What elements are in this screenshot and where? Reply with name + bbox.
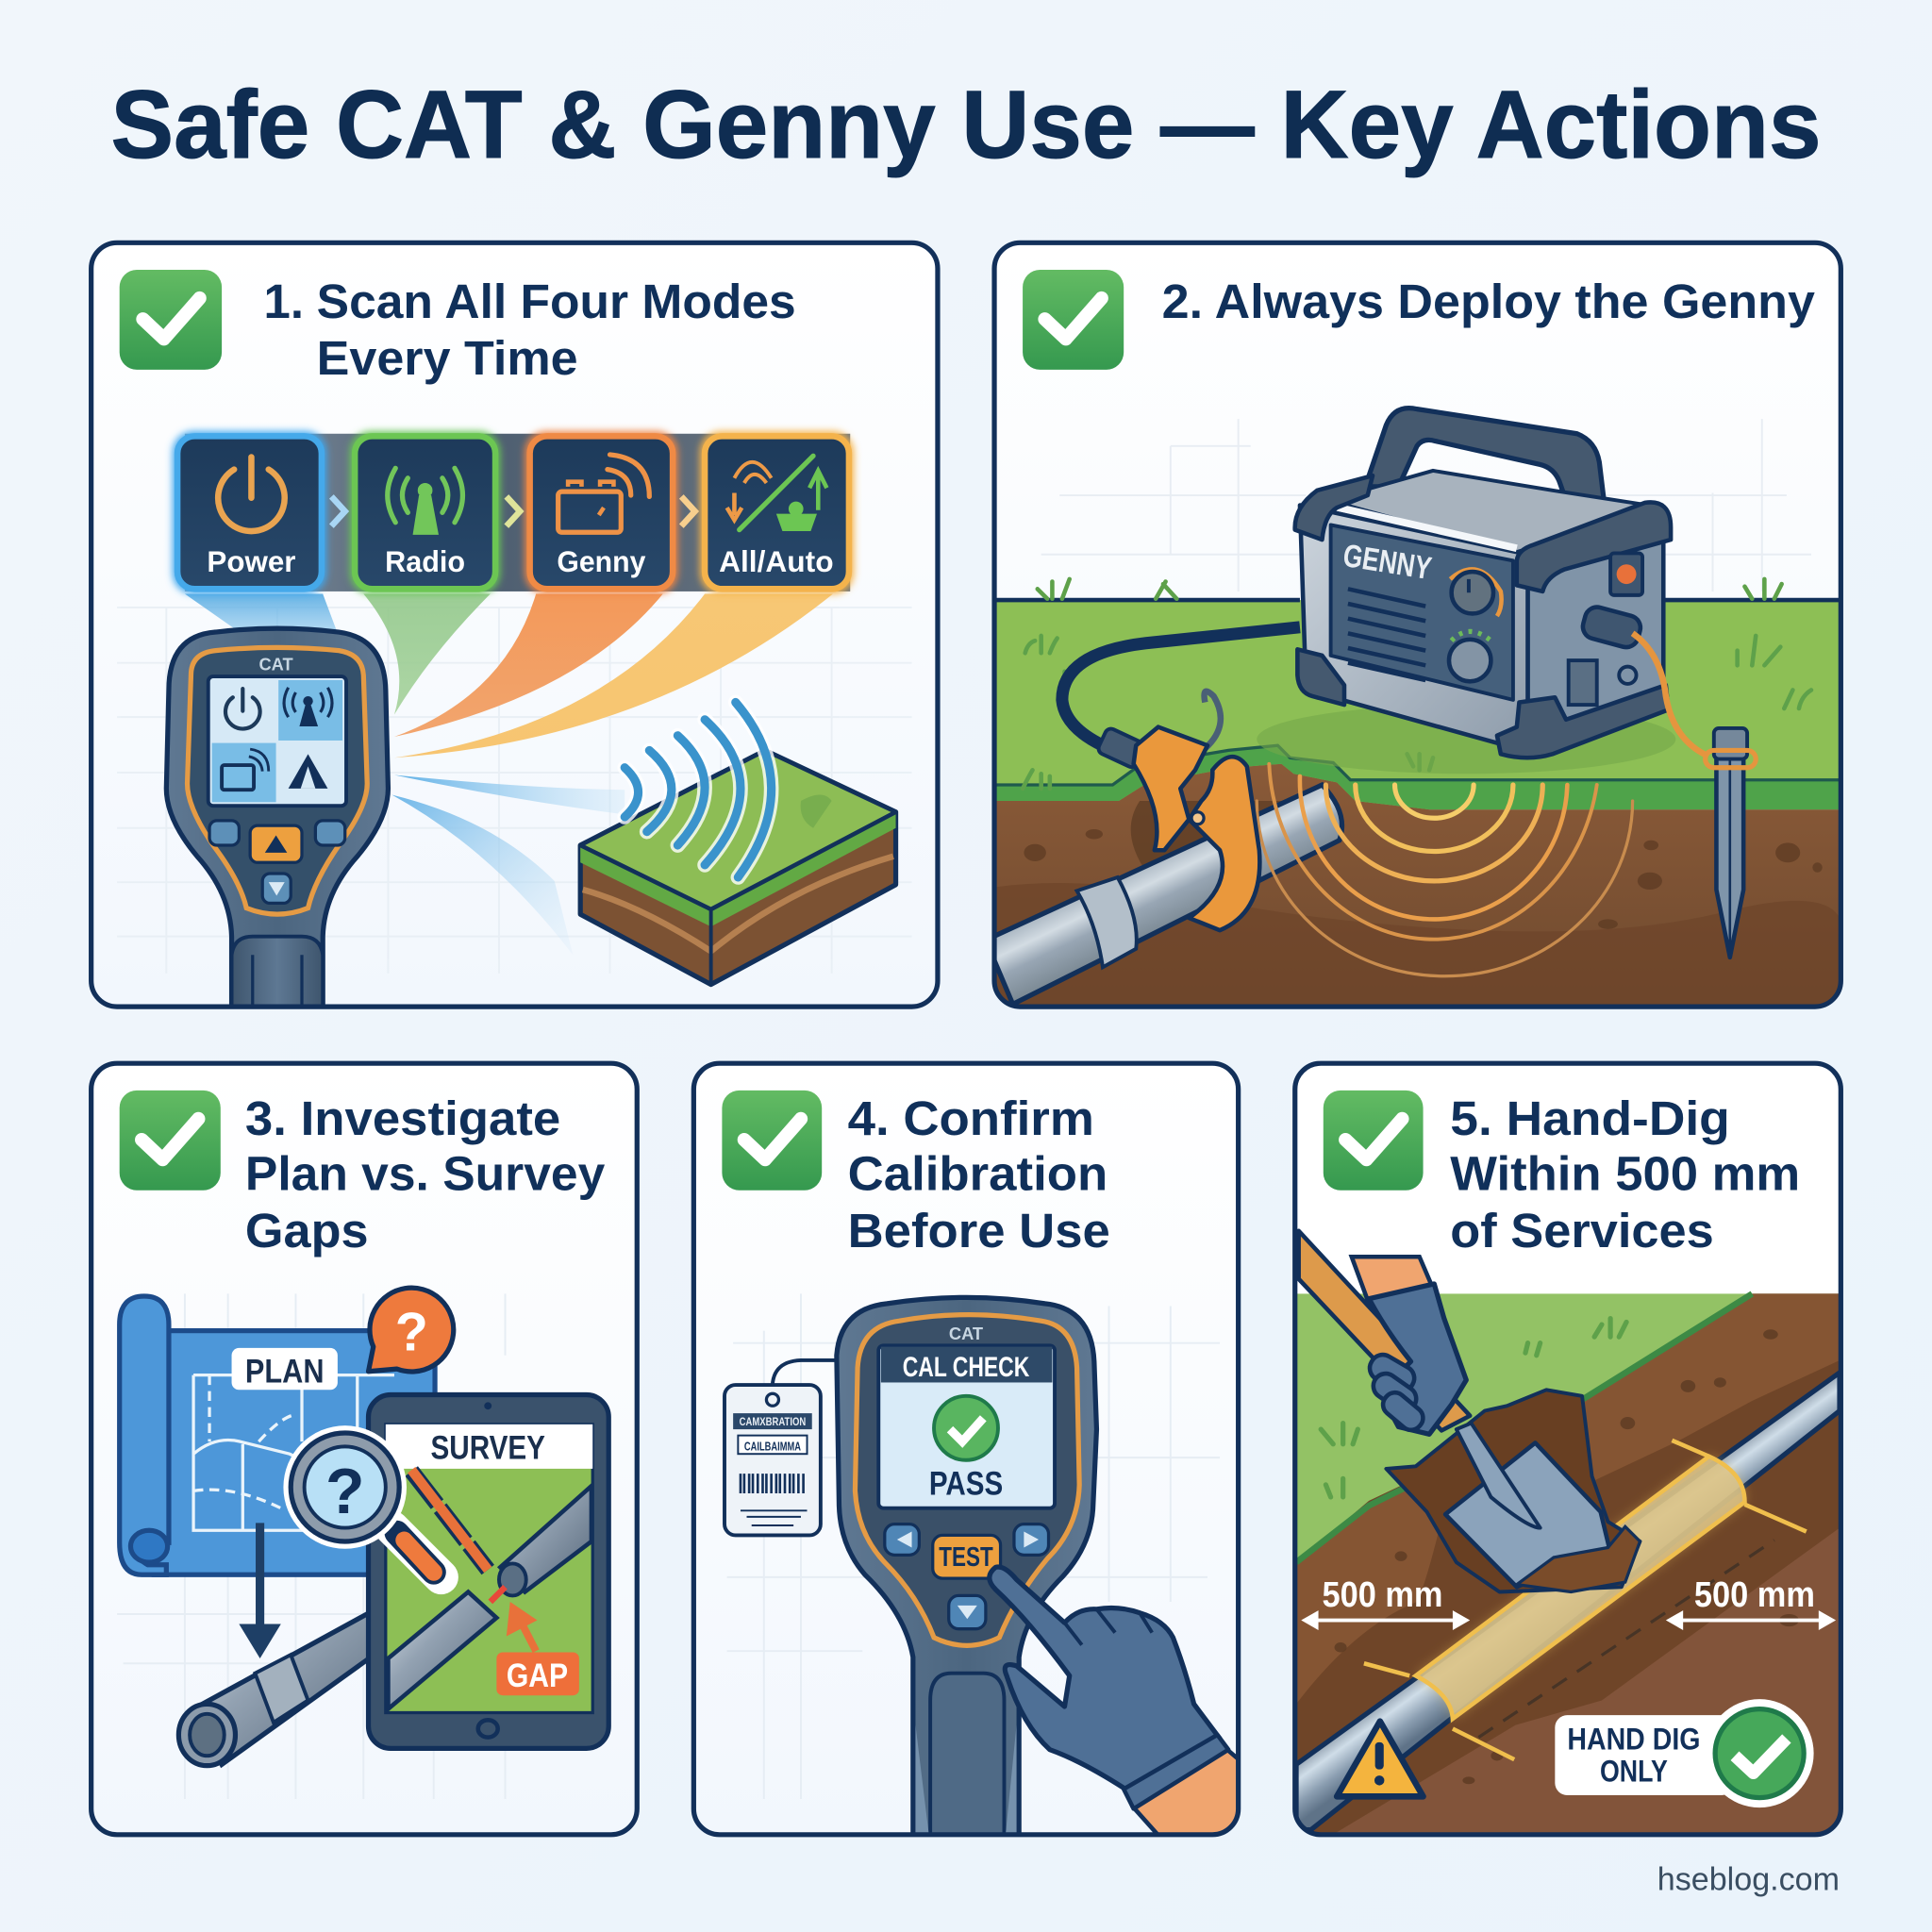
heading 5: Within 500 mm xyxy=(1450,1147,1800,1201)
panel 3: investigate plan vs survey gaps xyxy=(92,1063,637,1835)
black signal cable xyxy=(1062,627,1300,745)
mode tile: All/Auto: All/Auto xyxy=(719,545,834,578)
calibration tag: CAILBAIMMA xyxy=(744,1439,801,1453)
hand dig only badge xyxy=(1555,1699,1814,1807)
icon: question speech bubble xyxy=(369,1288,454,1372)
500 mm right dimension: 500 mm xyxy=(1694,1575,1815,1615)
dirt and spade xyxy=(1386,1390,1640,1592)
mode tile: Power xyxy=(173,431,326,594)
ground: grass and soil xyxy=(995,579,1840,1010)
heading 5: 5. Hand-Dig xyxy=(1450,1091,1730,1145)
heading 1: Scan All Four Modes xyxy=(317,275,796,328)
ground block with radio waves xyxy=(580,702,896,985)
icon: check badge 4 xyxy=(722,1091,822,1191)
CAT locator close-up xyxy=(837,1297,1096,1836)
CAT locator device xyxy=(166,628,388,1010)
500 mm left dimension: 500 mm xyxy=(1322,1575,1442,1615)
orange clamp xyxy=(1096,691,1259,930)
CAT locator close-up: PASS xyxy=(929,1465,1003,1502)
icon: check badge 3 xyxy=(120,1091,221,1191)
icon: question speech bubble: ? xyxy=(395,1303,428,1363)
source credit: hseblog.com xyxy=(1657,1862,1840,1898)
heading 1: Every Time xyxy=(317,331,578,385)
calibration tag xyxy=(724,1360,838,1535)
excavation scene xyxy=(1296,1231,1840,1836)
heading 5: of Services xyxy=(1450,1204,1714,1257)
heading 1: 1. xyxy=(264,275,304,328)
gap label: GAP xyxy=(507,1657,568,1694)
mode tile: All/Auto xyxy=(700,431,854,594)
mode strip: four scan modes xyxy=(173,431,854,594)
hand dig only badge: ONLY xyxy=(1600,1754,1668,1789)
genny generator xyxy=(1295,408,1671,758)
panel 2: always deploy the genny xyxy=(986,242,1840,1010)
title: Safe CAT & Genny Use — Key Actions xyxy=(111,71,1821,178)
test button: TEST xyxy=(939,1542,993,1573)
panel 1: scan all four modes xyxy=(92,242,938,1010)
CAT locator close-up: CAL CHECK xyxy=(903,1352,1029,1383)
signal beams from modes to locator xyxy=(185,594,833,955)
gloved hand on spade xyxy=(1352,1257,1466,1435)
heading 3: Gaps xyxy=(245,1204,369,1257)
orange earth wire xyxy=(1633,633,1707,756)
mode tile: Genny: Genny xyxy=(557,545,646,578)
calibration tag: CAMXBRATION xyxy=(740,1416,806,1428)
buried pipe xyxy=(986,785,1342,1004)
ground stake xyxy=(1706,728,1756,958)
mode tile: Radio: Radio xyxy=(385,545,465,578)
500 mm right dimension xyxy=(1666,1581,1836,1630)
heading 4: Before Use xyxy=(848,1204,1110,1257)
arrow plan to pipe xyxy=(239,1523,281,1658)
icon: check badge 1 xyxy=(120,270,222,370)
mode tile: Power: Power xyxy=(207,545,295,578)
pipe under plan xyxy=(178,1609,375,1766)
CAT locator device: CAT xyxy=(258,655,293,675)
hand dig only badge: HAND DIG xyxy=(1567,1722,1700,1757)
ground shadow under generator xyxy=(1257,705,1675,774)
panel 5: hand-dig within 500 mm xyxy=(1295,1063,1840,1836)
plan label: PLAN xyxy=(245,1353,325,1390)
survey label: SURVEY xyxy=(430,1429,545,1466)
gloved hand pressing test xyxy=(990,1567,1244,1842)
genny label: GENNY xyxy=(1341,538,1434,587)
icon: check badge 5 xyxy=(1324,1091,1424,1191)
heading 4: Calibration xyxy=(848,1147,1108,1201)
mode tile: Radio xyxy=(350,431,500,594)
heading 2: 2. Always Deploy the Genny xyxy=(1162,275,1816,328)
magnifying glass: ? xyxy=(325,1457,364,1527)
icon: check badge 2 xyxy=(1023,270,1124,370)
survey tablet xyxy=(369,1395,608,1748)
magnifying glass xyxy=(283,1425,441,1577)
mode tile: Genny xyxy=(525,431,677,594)
CAT locator close-up: CAT xyxy=(949,1324,983,1343)
blueprint plan xyxy=(120,1296,435,1574)
500 mm left dimension xyxy=(1301,1581,1470,1630)
heading 3: 3. Investigate xyxy=(245,1091,560,1145)
heading 4: 4. Confirm xyxy=(848,1091,1094,1145)
glowing service pipe xyxy=(1296,1373,1840,1830)
test button xyxy=(933,1535,1001,1578)
signal rings xyxy=(1257,764,1633,976)
warning triangle xyxy=(1337,1722,1424,1796)
heading 3: Plan vs. Survey xyxy=(245,1147,606,1201)
panel 4: confirm calibration before use xyxy=(693,1063,1244,1842)
